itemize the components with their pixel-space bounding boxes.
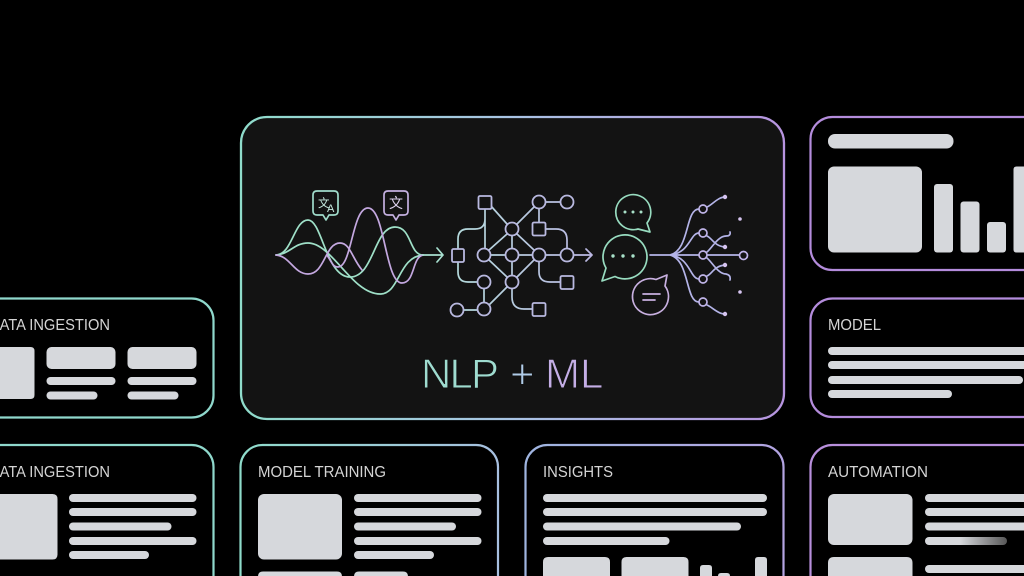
panel: model training — [240, 445, 498, 576]
icon: chat bubble large — [602, 235, 647, 281]
icon: translate bubble teal — [313, 191, 338, 220]
panel: insights — [526, 445, 784, 576]
panel: data ingestion bottom — [0, 445, 214, 576]
panel: data ingestion top — [0, 298, 214, 418]
heading: NLP + ML: NLP — [421, 350, 499, 397]
chart: overlapping waves — [276, 208, 423, 294]
icon: translate bubble purple — [384, 191, 408, 220]
icon: translate bubble teal: 文 — [318, 196, 330, 210]
diagram: neural network — [450, 196, 592, 316]
diagram: branching tree — [650, 195, 748, 316]
icon: chat bubble top — [616, 195, 651, 232]
panel: top right chart card — [810, 117, 1024, 270]
panel: model: MODEL — [828, 317, 881, 334]
icon: translate bubble purple: 文 — [389, 195, 403, 211]
panel: automation: AUTOMATION — [828, 464, 928, 481]
arrow: waves to network — [423, 248, 443, 262]
panel: model — [810, 298, 1024, 417]
panel: NLP + ML main card — [241, 117, 784, 419]
icon: message bubble purple — [632, 275, 668, 315]
icon: translate bubble teal: A — [327, 203, 335, 215]
panel: insights: INSIGHTS — [543, 464, 613, 481]
panel: model training: MODEL TRAINING — [258, 464, 386, 481]
heading: NLP + ML: ML — [545, 350, 603, 397]
panel: automation — [810, 445, 1024, 576]
heading: NLP + ML: + — [510, 350, 535, 397]
